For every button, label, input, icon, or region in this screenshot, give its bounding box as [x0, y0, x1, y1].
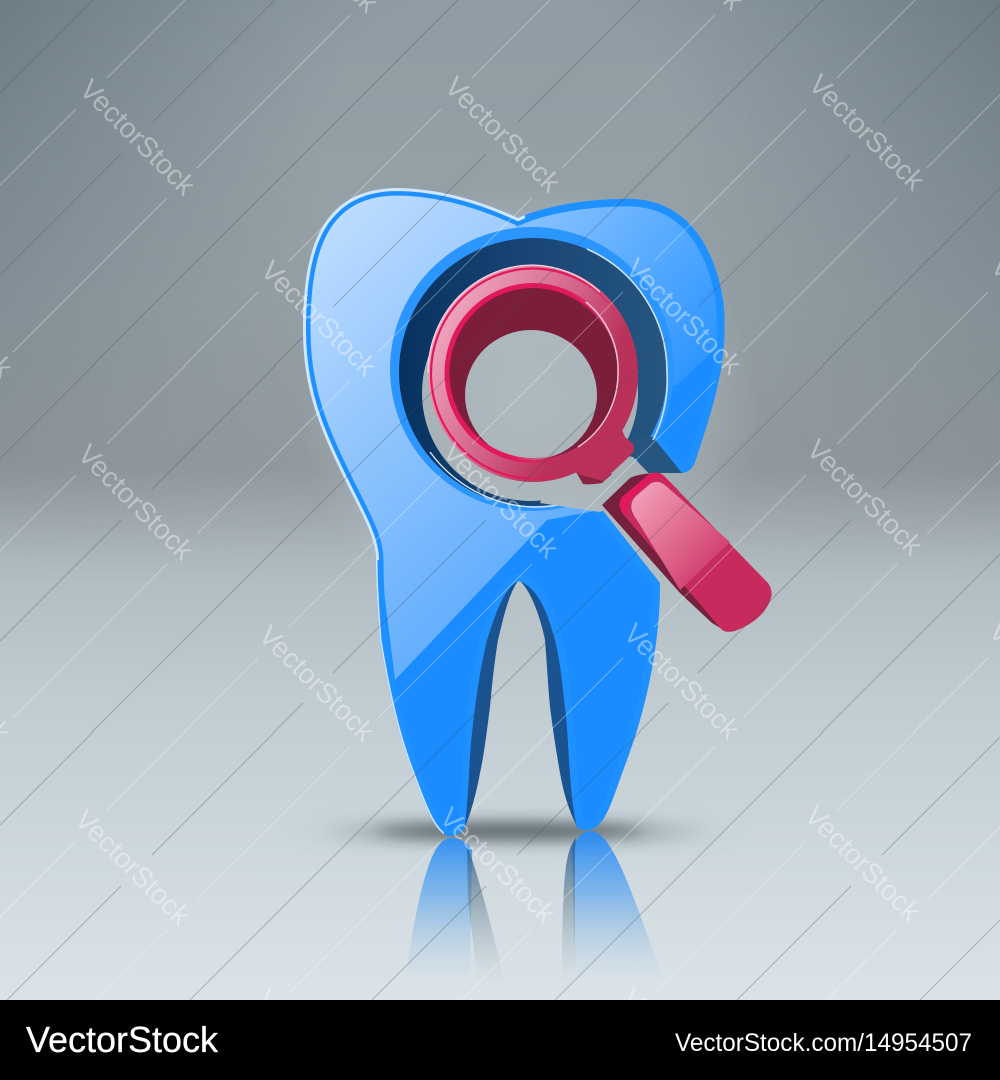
- handle: [602, 473, 772, 632]
- lens ring: [428, 265, 638, 482]
- footer brand: VectorStock: [26, 1019, 219, 1060]
- lens interior: [448, 286, 618, 460]
- watermark labels: VectorStock: [799, 799, 927, 928]
- watermark labels: VectorStock: [74, 73, 202, 202]
- tooth: [295, 180, 730, 836]
- watermark labels: VectorStock: [801, 433, 929, 562]
- hole rim: [390, 227, 674, 511]
- footer bar: [0, 1000, 1000, 1080]
- tooth reflection: [404, 831, 665, 985]
- watermark labels: VectorStock: [255, 254, 383, 383]
- tooth body: [303, 188, 725, 836]
- watermark labels: VectorStock: [803, 68, 931, 197]
- watermark labels: VectorStock: [434, 801, 562, 930]
- watermark labels: VectorStock: [437, 436, 565, 565]
- root inner sides: [465, 581, 578, 828]
- ring rims: [428, 265, 635, 478]
- watermark labels: VectorStock: [69, 803, 197, 932]
- stem: [575, 420, 634, 484]
- hole dark inside: [399, 238, 667, 506]
- watermark labels: VectorStock: [618, 617, 746, 746]
- footer url: VectorStock.com/14954507: [675, 1029, 972, 1057]
- magnifying glass: [428, 265, 772, 632]
- watermark labels: VectorStock: [72, 438, 200, 567]
- gloss highlight: [295, 180, 730, 836]
- watermark labels: VectorStock: [439, 70, 567, 199]
- watermark labels: VectorStock: [253, 619, 381, 748]
- watermark labels: VectorStock: [620, 252, 748, 381]
- floor shadow: [330, 821, 700, 843]
